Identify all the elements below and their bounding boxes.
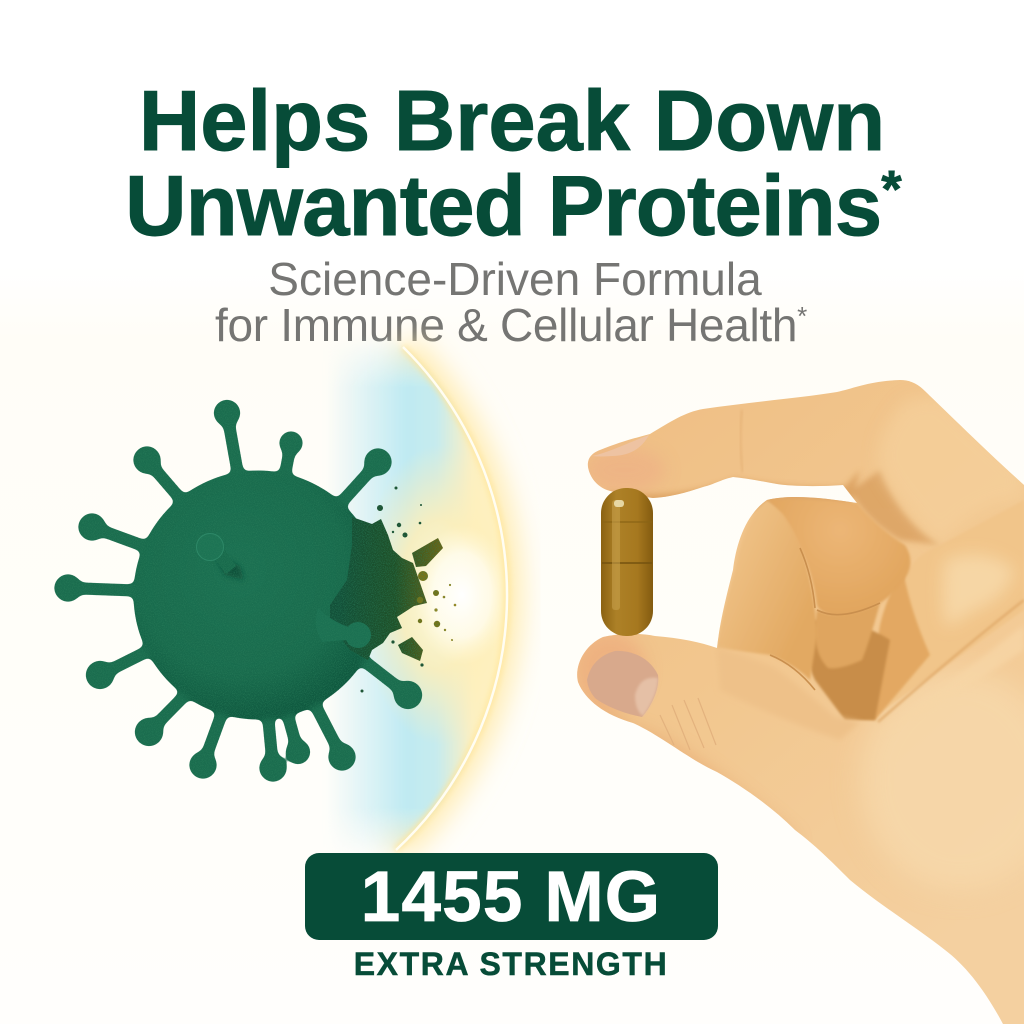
hand bbox=[570, 370, 1024, 1024]
subtitle bbox=[215, 253, 807, 351]
palm folds bbox=[877, 504, 1024, 723]
title bbox=[125, 74, 902, 254]
thumb base fold bbox=[768, 687, 857, 737]
dose badge: 1455 MG bbox=[361, 858, 661, 937]
disintegrating edge bbox=[330, 517, 443, 661]
finger creases bbox=[660, 548, 880, 750]
title: Helps Break Down bbox=[139, 74, 885, 169]
curled finger: left segment bbox=[717, 500, 817, 680]
badge caption: EXTRA STRENGTH bbox=[354, 946, 668, 982]
curled finger: top segment bbox=[767, 499, 910, 617]
right spike on body bbox=[316, 608, 371, 648]
virus body and spikes bbox=[54, 400, 422, 782]
title: Unwanted Proteins bbox=[125, 159, 881, 254]
capsule bbox=[601, 488, 653, 636]
fingernails bbox=[587, 435, 658, 717]
front spike bbox=[196, 534, 244, 580]
hand shading bbox=[574, 395, 1024, 890]
virus bbox=[54, 400, 481, 782]
curled finger: crevice bbox=[806, 620, 890, 720]
curled finger: right segment bbox=[868, 578, 930, 721]
subtitle: for Immune & Cellular Health bbox=[215, 299, 797, 351]
energy shield bbox=[336, 325, 537, 853]
hand base bbox=[570, 370, 1024, 1024]
dose badge bbox=[305, 853, 718, 940]
subtitle: * bbox=[797, 301, 807, 331]
title: * bbox=[881, 161, 902, 219]
debris particles bbox=[360, 486, 424, 692]
subtitle: Science-Driven Formula bbox=[268, 253, 762, 305]
curled finger: lower segment bbox=[815, 603, 880, 668]
